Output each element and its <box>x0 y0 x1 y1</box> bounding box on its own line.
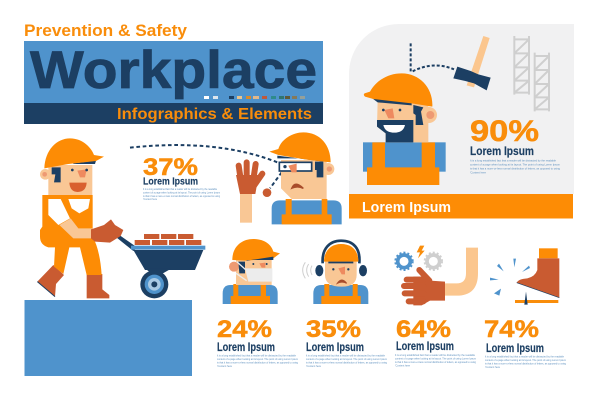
illustration: boot on nail <box>490 248 559 305</box>
platform block <box>24 300 192 376</box>
icon: scaffolding <box>514 36 549 111</box>
stat: 37 percent <box>143 154 220 201</box>
stat: 64 percent: 64% <box>396 316 451 343</box>
sound waves <box>303 262 312 278</box>
stat: 37 percent: Lorem Ipsum <box>143 176 198 188</box>
stat: 24 percent: is that it has a more-or-less normal distribution of letters, as opposed to using <box>217 360 298 364</box>
stat: 74 percent: It is a long established fact that a reader will be distracted by the readable <box>485 354 564 358</box>
stat: 74 percent: 74% <box>484 316 539 343</box>
stat: 35 percent: Lorem Ipsum <box>306 342 364 354</box>
stat: 74 percent: 'Content here <box>485 365 500 369</box>
stat: 24 percent: 'Content here <box>217 364 232 368</box>
overalls <box>40 195 102 275</box>
panel: 90 percent <box>349 24 574 218</box>
colour palette swatches <box>204 96 305 99</box>
heading: prevention and safety: Prevention & Safety <box>24 21 188 40</box>
worker with glasses <box>269 132 342 224</box>
stat: 74 percent: content of a page when looking at its layout. The point of using Lorem Ipsum <box>485 358 566 362</box>
worker with ear defenders <box>303 241 368 304</box>
stat: 35 percent: content of a page when looking at its layout. The point of using Lorem Ipsum <box>306 357 387 361</box>
stat: 35 percent: 35% <box>306 316 361 343</box>
subtitle: Infographics & Elements <box>117 106 312 123</box>
stat: 24 percent <box>217 316 298 368</box>
title banner <box>24 41 323 124</box>
icon: hammer <box>453 36 491 90</box>
falling path arrows <box>411 43 454 73</box>
stat: 35 percent <box>306 316 387 368</box>
stat: 37 percent: It is a long established fact that a reader will be distracted by the readable <box>143 187 217 191</box>
stat: 24 percent: 24% <box>217 316 272 343</box>
stat: 35 percent: is that it has a more-or-less normal distribution of letters, as opposed to using <box>306 360 387 364</box>
stat: 90 percent: 90% <box>470 115 539 148</box>
stat: 64 percent: is that it has a more-or-less normal distribution of letters, as opposed to using <box>395 360 476 364</box>
stat: 90 percent <box>470 115 560 174</box>
impact sparks <box>490 259 530 296</box>
stat: 35 percent: 'Content here <box>306 364 321 368</box>
stat: 37 percent: 'Content here <box>143 197 157 201</box>
spark <box>417 246 425 258</box>
stat: 90 percent: content of a page when looking at its layout. The point of using Lorem Ipsum <box>470 162 560 166</box>
stat: 37 percent: is that it has a more-or-less normal distribution of letters, as opposed to using <box>143 194 220 198</box>
stat: 90 percent: is that it has a more-or-less normal distribution of letters, as opposed to using <box>470 166 560 170</box>
stat: 74 percent <box>484 316 566 369</box>
footer bar <box>349 194 573 218</box>
stat: 37 percent: content of a page when looking at its layout. The point of using Lorem Ipsum <box>143 190 220 194</box>
hard hat <box>44 138 104 168</box>
gears <box>395 253 442 270</box>
boots <box>37 265 64 297</box>
stat: 64 percent: Lorem Ipsum <box>396 341 454 353</box>
stat: 74 percent: is that it has a more-or-less normal distribution of letters, as opposed to using <box>485 362 566 366</box>
stat: 37 percent: 37% <box>143 154 198 181</box>
dashed sight line <box>130 145 282 188</box>
stat: 90 percent: 'Content here <box>470 170 486 174</box>
hard hat <box>364 73 432 107</box>
stat: 90 percent: Lorem Ipsum <box>470 146 534 158</box>
illustration: hand and gears <box>395 246 478 305</box>
stat: 74 percent: Lorem Ipsum <box>486 343 544 355</box>
arm <box>443 248 478 296</box>
glove <box>91 219 123 243</box>
icon: raised glove with drop <box>236 162 271 223</box>
stat: 64 percent: 'Content here <box>395 364 410 368</box>
stat: 64 percent: It is a long established fact that a reader will be distracted by the readable <box>395 353 475 357</box>
stat: 24 percent: It is a long established fact that a reader will be distracted by the readable <box>217 354 296 358</box>
footer bar: Lorem Ipsum <box>362 199 451 216</box>
stat: 24 percent: content of a page when looking at its layout. The point of using Lorem Ipsum <box>217 357 298 361</box>
worker with dust mask <box>223 239 280 304</box>
stat: 24 percent: Lorem Ipsum <box>217 342 275 354</box>
worker with beard <box>363 73 446 185</box>
bricks <box>135 234 201 245</box>
stat: 64 percent: content of a page when looking at its layout. The point of using Lorem Ipsum <box>395 356 476 360</box>
hand <box>404 270 445 305</box>
title: Workplace: Workplace <box>30 41 317 100</box>
stat: 35 percent: It is a long established fact that a reader will be distracted by the readable <box>306 354 385 358</box>
illustration: worker pushing <box>37 138 123 298</box>
stat: 90 percent: It is a long established fact that a reader will be distracted by the readable <box>470 158 556 162</box>
stat: 64 percent <box>395 316 476 368</box>
head <box>48 165 92 195</box>
wheelbarrow <box>117 235 205 298</box>
